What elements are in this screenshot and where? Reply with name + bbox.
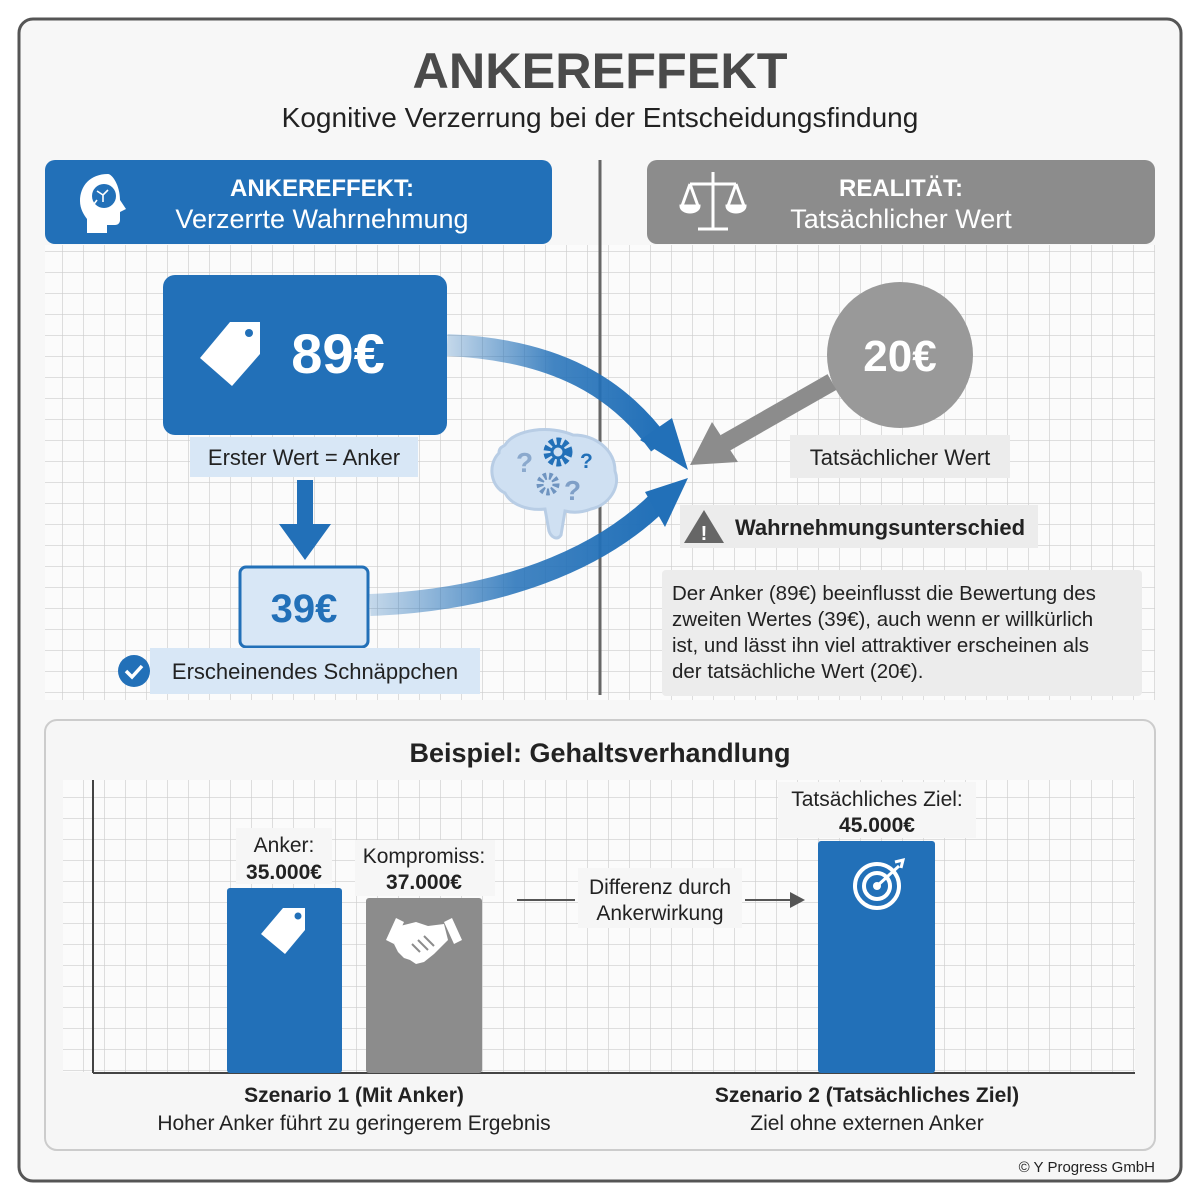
bar: kompromiss: 37.000€	[386, 871, 462, 894]
arrows: curved to perception point	[370, 345, 688, 605]
label: wahrnehmungsunterschied	[680, 505, 1038, 548]
bar chart	[63, 780, 1135, 1073]
caption: scenario 2	[715, 1084, 1019, 1135]
bar: ziel: Tatsächliches Ziel:	[791, 788, 963, 811]
title: ANKEREFFEKT	[412, 43, 788, 99]
caption: scenario 1: Szenario 1 (Mit Anker)	[244, 1084, 464, 1107]
header: left: ANKEREFFEKT:	[230, 175, 414, 202]
callout: differenz: Differenz durch	[589, 876, 731, 899]
label: wahrnehmungsunterschied: !	[701, 523, 707, 545]
copyright: © Y Progress GmbH	[1019, 1159, 1155, 1176]
label: schnaeppchen: Erscheinendes Schnäppchen	[172, 659, 458, 684]
price box 89: 89€	[291, 322, 385, 385]
label: tatsaechlicher wert	[790, 435, 1010, 478]
header: right	[647, 160, 1155, 244]
text block: explanation	[662, 570, 1142, 696]
text block: explanation: der tatsächliche Wert (20€).	[672, 660, 923, 683]
callout: differenz	[517, 868, 805, 928]
bar: anker: Anker:	[254, 834, 314, 857]
header: left: Verzerrte Wahrnehmung	[175, 204, 469, 234]
caption: scenario 1: Hoher Anker führt zu geringerem Ergebnis	[157, 1112, 551, 1135]
text block: explanation: ist, und lässt ihn viel attraktiver erscheinen als	[672, 634, 1089, 657]
panel: salary example	[45, 720, 1155, 1150]
circle: 20	[827, 282, 973, 428]
caption: scenario 2: Ziel ohne externen Anker	[750, 1112, 984, 1135]
header: left	[45, 160, 552, 244]
callout: differenz: Ankerwirkung	[596, 902, 724, 925]
label: wahrnehmungsunterschied: Wahrnehmungsunterschied	[735, 515, 1025, 540]
bar: ziel	[778, 782, 976, 1073]
label: erster wert	[190, 437, 418, 477]
label: erster wert: Erster Wert = Anker	[208, 445, 400, 470]
caption: scenario 2: Szenario 2 (Tatsächliches Ziel)	[715, 1084, 1019, 1107]
subtitle: Kognitive Verzerrung bei der Entscheidungsfindung	[282, 102, 918, 133]
arrow: down	[279, 480, 331, 560]
label: schnaeppchen	[118, 648, 480, 694]
header: right: REALITÄT:	[839, 175, 963, 202]
icon: tag	[200, 322, 260, 386]
icon: brain with gears: ?	[564, 475, 581, 506]
label: tatsaechlicher wert: Tatsächlicher Wert	[810, 445, 990, 470]
price box 39: 39€	[271, 587, 337, 631]
grid background	[45, 245, 1155, 700]
icon: head with brain	[80, 174, 126, 233]
icon: scales	[681, 172, 745, 229]
bar: anker	[227, 828, 342, 1073]
heading: beispiel: Beispiel: Gehaltsverhandlung	[409, 738, 791, 768]
bar: anker: 35.000€	[246, 861, 322, 884]
price box 89	[163, 275, 447, 435]
caption: scenario 1	[157, 1084, 551, 1135]
text block: explanation: Der Anker (89€) beeinflusst die Bewertung des	[672, 582, 1096, 605]
text block: explanation: zweiten Wertes (39€), auch wenn er willkürlich	[672, 608, 1093, 631]
bar: kompromiss	[355, 840, 495, 1073]
bar: kompromiss: Kompromiss:	[363, 845, 485, 868]
bar: ziel: 45.000€	[839, 814, 915, 837]
icon: brain with gears	[492, 430, 617, 538]
divider	[598, 160, 602, 695]
icon: brain with gears: ?	[580, 450, 593, 473]
circle: 20: 20€	[863, 332, 937, 381]
arrow: gray	[690, 382, 832, 465]
icon: brain with gears: ?	[516, 447, 533, 478]
price box 39	[240, 567, 368, 647]
header: right: Tatsächlicher Wert	[790, 204, 1012, 234]
